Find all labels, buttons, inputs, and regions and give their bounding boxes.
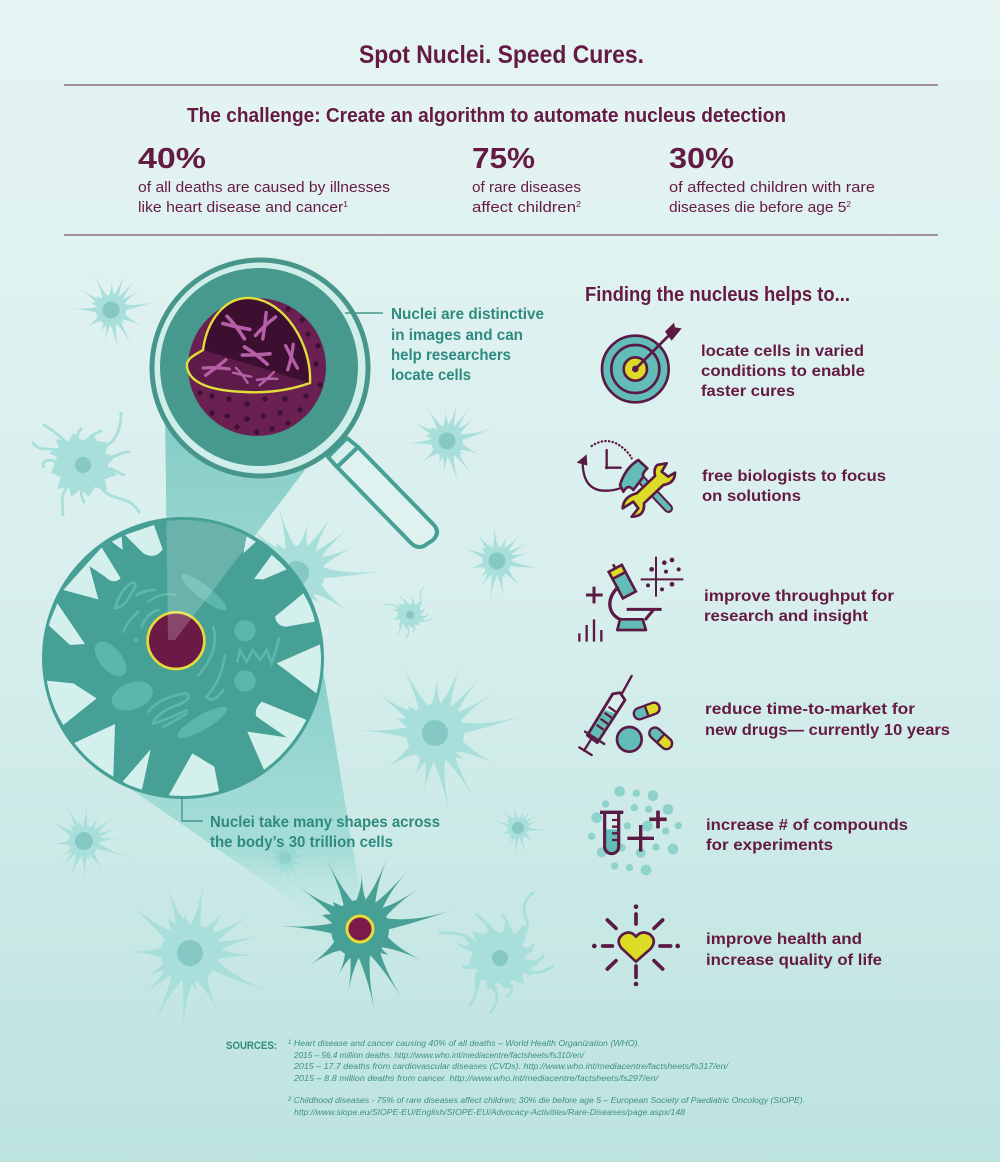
stat: 30%: diseases die before age 5	[669, 199, 841, 216]
stat: 30%	[669, 143, 875, 216]
label: improve health	[706, 931, 882, 969]
stat: 75%: 75%	[472, 143, 535, 175]
label: locate cells: locate cells in varied	[701, 343, 864, 360]
sources: 2	[287, 1097, 292, 1103]
stat: 75%: 2	[576, 200, 582, 209]
callout: nuclei distinctive: Nuclei are distinctive	[391, 306, 544, 323]
stat: 40%: 40%	[138, 143, 206, 175]
sources: Childhood diseases - 75% of rare diseases affect children; 30% die before age 5 – European Society of Paediatric Oncology (SIOPE).	[291, 1095, 805, 1105]
label: locate cells	[701, 343, 865, 400]
nucleus sphere	[187, 298, 326, 436]
stat: 30%: 2	[846, 200, 852, 209]
icon: test tube with compounds	[588, 786, 682, 875]
sources: 2015 – 17.7 deaths from cardiovascular diseases (CVDs). http://www.who.int/mediacentre/factsheets/fs317/en/	[293, 1061, 730, 1071]
label: increase compounds: increase # of compounds	[706, 817, 908, 834]
stat: 75%: affect children	[472, 199, 565, 216]
label: reduce time to market: new drugs— currently 10 years	[705, 722, 950, 739]
nucleus	[148, 612, 204, 669]
callout: nuclei distinctive: in images and can	[391, 327, 523, 344]
zoom cone: magnifier to nucleus	[165, 415, 305, 640]
label: reduce time to market	[705, 701, 950, 739]
label: locate cells: conditions to enable	[701, 363, 865, 380]
stat: 40%	[138, 143, 390, 216]
label: improve throughput	[704, 588, 894, 625]
label: reduce time to market: reduce time-to-market for	[705, 701, 915, 718]
label: improve health: increase quality of life	[706, 952, 882, 969]
callout: many shapes	[182, 798, 440, 851]
challenge heading: The challenge: Create an algorithm to automate nucleus detection	[187, 105, 786, 127]
stat: 30%: 30%	[669, 143, 734, 175]
sources: 2015 – 56.4 million deaths. http://www.who.int/mediacentre/factsheets/fs310/en/	[293, 1050, 586, 1060]
background cells	[27, 273, 555, 1076]
magnifying glass	[152, 260, 437, 547]
label: free biologists	[702, 468, 886, 505]
label: free biologists: free biologists to focus	[702, 468, 886, 485]
label: locate cells: faster cures	[701, 383, 795, 400]
stat: 40%: of all deaths are caused by illnesses	[138, 179, 390, 196]
label: increase compounds: for experiments	[706, 837, 833, 854]
stat: 40%: like heart disease and cancer	[138, 199, 333, 216]
label: increase compounds	[706, 817, 908, 854]
icon: microscope	[579, 557, 683, 642]
stat: 75%: of rare diseases	[472, 179, 581, 196]
sources: 1	[288, 1040, 291, 1046]
stat: 75%	[472, 143, 582, 216]
cell cross-section	[42, 517, 324, 799]
sources: 2015 – 8.8 million deaths from cancer. http://www.who.int/mediacentre/factsheets/fs297/en/	[293, 1073, 660, 1083]
label: improve throughput: improve throughput for	[704, 588, 894, 605]
callout: nuclei distinctive	[345, 306, 544, 384]
single highlighted cell	[281, 858, 455, 1012]
callout: many shapes: the body’s 30 trillion cells	[210, 834, 393, 851]
label: free biologists: on solutions	[702, 488, 801, 505]
stat: 30%: of affected children with rare	[669, 179, 875, 196]
title: Spot Nuclei. Speed Cures.	[359, 41, 644, 69]
icon: target	[602, 323, 682, 402]
heading: finding the nucleus: Finding the nucleus helps to...	[585, 284, 850, 306]
sources: Heart disease and cancer causing 40% of all deaths – World Health Organization (WHO).	[291, 1038, 640, 1048]
zoom cone: cell to single cell	[125, 670, 365, 930]
label: improve throughput: research and insight	[704, 608, 869, 625]
sources	[226, 1038, 805, 1117]
icon: syringe and pills	[579, 676, 674, 755]
sources: http://www.siope.eu/SIOPE-EU/English/SIOPE-EU/Advocacy-Activities/Rare-Diseases/page.aspx/148	[294, 1107, 685, 1117]
callout: nuclei distinctive: help researchers	[391, 347, 511, 364]
callout: many shapes: Nuclei take many shapes across	[210, 814, 440, 831]
label: improve health: improve health and	[706, 931, 862, 948]
icon: clock and tools	[577, 441, 675, 517]
callout: nuclei distinctive: locate cells	[391, 367, 471, 384]
sources: SOURCES:	[226, 1040, 277, 1052]
icon: heart with rays	[592, 904, 680, 986]
stat: 40%: 1	[343, 200, 349, 209]
